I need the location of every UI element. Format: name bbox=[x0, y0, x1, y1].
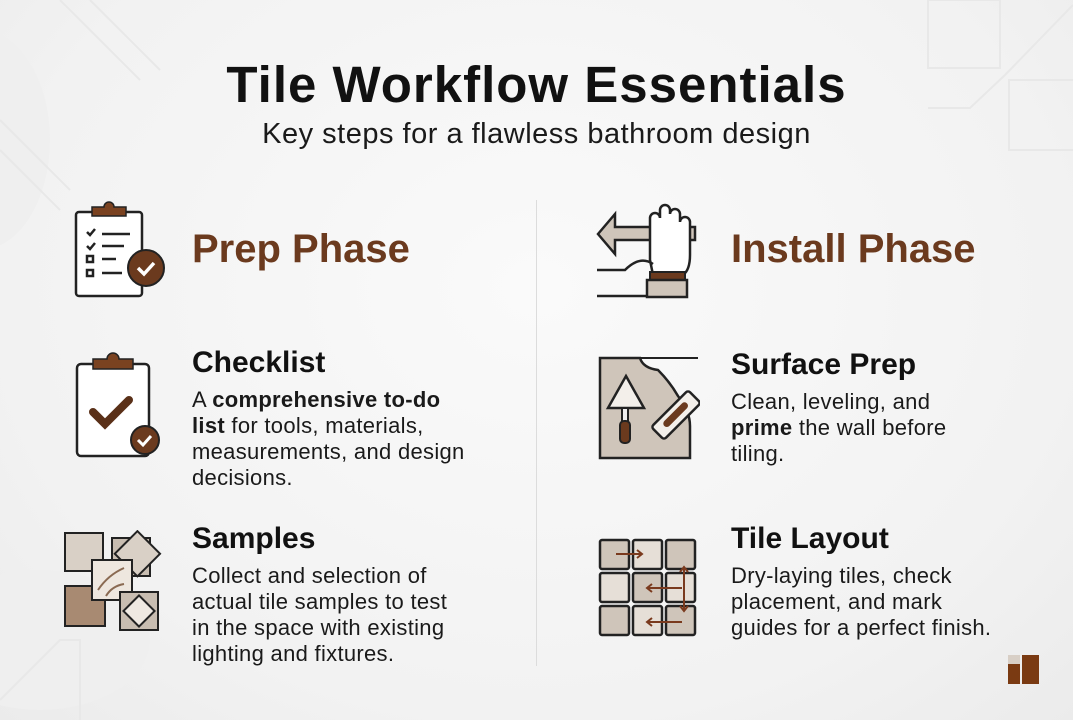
icon: surface prep bbox=[598, 356, 700, 460]
text: tile layout: guides for a perfect finish. bbox=[731, 615, 991, 640]
heading: install phase: Install Phase bbox=[731, 227, 976, 271]
text: samples: in the space with existing bbox=[192, 615, 444, 640]
icon: prep clipboard bbox=[74, 201, 165, 298]
icon: samples bbox=[64, 530, 162, 631]
text: checklist: measurements, and design bbox=[192, 439, 465, 464]
text: surface prep: Clean, leveling, and bbox=[731, 389, 930, 414]
text: checklist bbox=[192, 346, 465, 490]
text: checklist: Checklist bbox=[192, 346, 325, 379]
text: samples: Collect and selection of bbox=[192, 563, 427, 588]
text: samples: Samples bbox=[192, 522, 315, 555]
divider bbox=[536, 200, 537, 666]
text: tile layout: placement, and mark bbox=[731, 589, 942, 614]
text: surface prep: tiling. bbox=[731, 441, 784, 466]
icon: checklist bbox=[76, 352, 160, 458]
text: surface prep bbox=[731, 348, 946, 466]
text: checklist: decisions. bbox=[192, 465, 293, 490]
title: Tile Workflow Essentials bbox=[226, 56, 847, 113]
heading: prep phase: Prep Phase bbox=[192, 227, 410, 271]
text: samples bbox=[192, 522, 447, 666]
subtitle: Key steps for a flawless bathroom design bbox=[262, 118, 811, 150]
icon: tile layout bbox=[598, 538, 696, 636]
text: samples: lighting and fixtures. bbox=[192, 641, 394, 666]
text: surface prep: Surface Prep bbox=[731, 348, 916, 381]
text: tile layout: Dry-laying tiles, check bbox=[731, 563, 952, 588]
text: samples: actual tile samples to test bbox=[192, 589, 447, 614]
text: tile layout: Tile Layout bbox=[731, 522, 889, 555]
logo bbox=[1008, 655, 1039, 684]
text: tile layout bbox=[731, 522, 991, 640]
text: checklist: A comprehensive to-do bbox=[192, 387, 440, 412]
text: checklist: list for tools, materials, bbox=[192, 413, 424, 438]
text: surface prep: prime the wall before bbox=[731, 415, 946, 440]
icon: install hand hammer bbox=[596, 204, 696, 298]
